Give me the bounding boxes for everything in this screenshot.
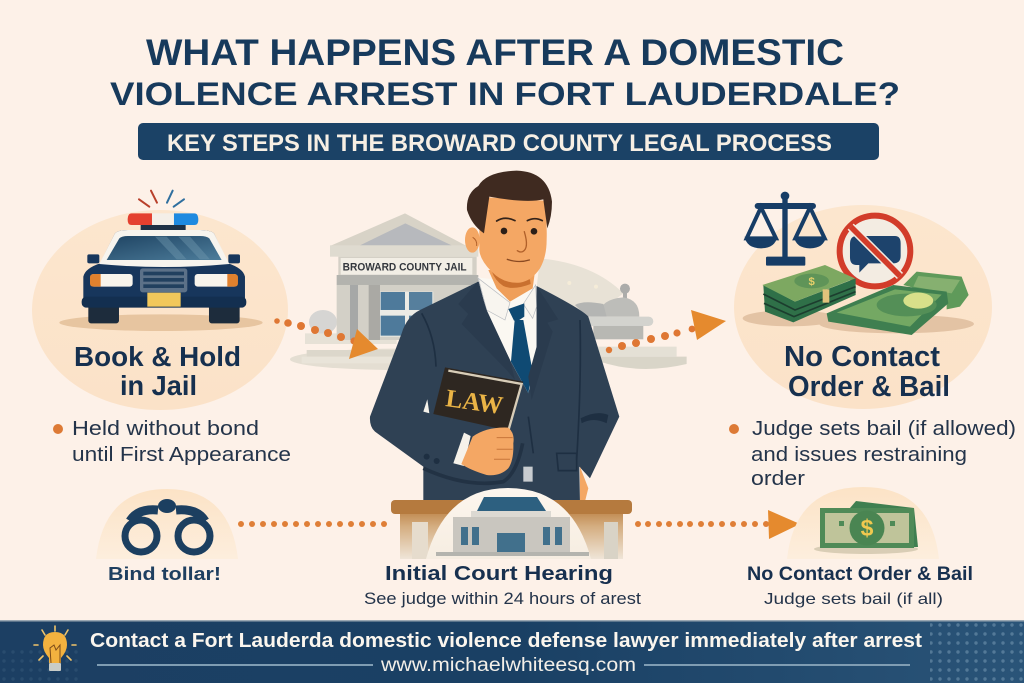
footer band <box>0 620 1024 683</box>
title: VIOLENCE ARREST IN FORT LAUDERDALE? <box>110 76 900 112</box>
dotted connector left <box>238 521 387 527</box>
text: judge sets bail: Judge sets bail (if all) <box>764 591 943 608</box>
hair <box>467 171 552 233</box>
icon: handcuffs <box>125 500 210 552</box>
lapels <box>458 282 515 380</box>
heading: book and hold in jail: Book & Hold <box>74 341 241 372</box>
desk top <box>391 500 632 514</box>
icon: stack of cash: $ <box>808 276 815 288</box>
law book <box>433 367 523 431</box>
bullet text: held without bond <box>53 417 291 466</box>
desk legs <box>400 512 623 559</box>
icon: dollar bill <box>814 501 918 554</box>
bullet text: held without bond: until First Appearance <box>72 443 291 466</box>
heading: book and hold in jail: in Jail <box>120 370 197 401</box>
half circle <box>787 487 939 559</box>
head <box>465 227 480 253</box>
panel: book and hold in jail <box>32 191 291 466</box>
panel: initial court hearing <box>364 488 641 608</box>
bullet text: judge sets bail: Judge sets bail (if allowed) <box>752 418 1016 440</box>
arrow: jail to lawyer dotted <box>274 318 378 359</box>
tie <box>508 303 532 393</box>
heading: book and hold in jail <box>74 341 241 401</box>
dotted connector right with arrow <box>635 510 800 539</box>
neck <box>488 270 535 302</box>
title <box>110 31 900 112</box>
bullet text: held without bond: Held without bond <box>72 417 259 440</box>
lawyer figure <box>370 171 619 502</box>
jail building <box>290 213 503 370</box>
collar <box>478 278 537 320</box>
label: bind tollar: Bind tollar! <box>108 563 221 584</box>
panel: no contact order and bail <box>729 192 1016 490</box>
heading: no contact order and bail small: No Contact Order & Bail <box>747 563 973 585</box>
shirt <box>478 277 537 393</box>
courthouse dome <box>426 488 591 559</box>
step circle left <box>32 210 288 410</box>
half circle <box>96 489 238 559</box>
heading: no contact order and bail <box>784 341 950 403</box>
subtitle banner <box>138 123 879 160</box>
bullet text: judge sets bail <box>729 418 1016 490</box>
law book: LAW <box>444 384 505 420</box>
bullet text: judge sets bail: and issues restraining <box>751 444 967 466</box>
suit <box>370 282 619 502</box>
icon: no messaging sign <box>840 216 910 286</box>
heading: initial court hearing: Initial Court Hearing <box>385 562 613 585</box>
courthouse background right <box>533 258 687 369</box>
sleeve shadow <box>423 443 523 483</box>
subtitle banner: KEY STEPS IN THE BROWARD COUNTY LEGAL PROCESS <box>167 130 832 157</box>
icon: police car <box>59 191 263 331</box>
icon: light bulb <box>34 626 76 671</box>
panel: handcuffs step <box>96 489 238 584</box>
icon: scales of justice <box>745 192 826 266</box>
heading: no contact order and bail: Order & Bail <box>788 371 950 403</box>
heading: no contact order and bail: No Contact <box>784 341 941 373</box>
title: WHAT HAPPENS AFTER A DOMESTIC <box>146 31 844 73</box>
panel: bail step <box>747 487 973 608</box>
icon: stack of cash <box>743 265 974 335</box>
arrow: lawyer to bail dotted <box>606 310 726 353</box>
text: see judge within 24 hours: See judge within 24 hours of arest <box>364 590 641 608</box>
step circle right <box>734 205 992 409</box>
face details <box>497 218 542 262</box>
hand and cuff <box>453 428 514 475</box>
bullet text: judge sets bail: order <box>751 468 805 490</box>
icon: dollar bill: $ <box>861 515 874 541</box>
sign text: broward county jail: BROWARD COUNTY JAIL <box>343 261 467 273</box>
footer call to action: Contact a Fort Lauderda domestic violence defense lawyer immediately after arrest <box>90 629 922 652</box>
icon: courthouse <box>436 497 589 556</box>
footer website: www.michaelwhiteesq.com <box>380 655 636 676</box>
